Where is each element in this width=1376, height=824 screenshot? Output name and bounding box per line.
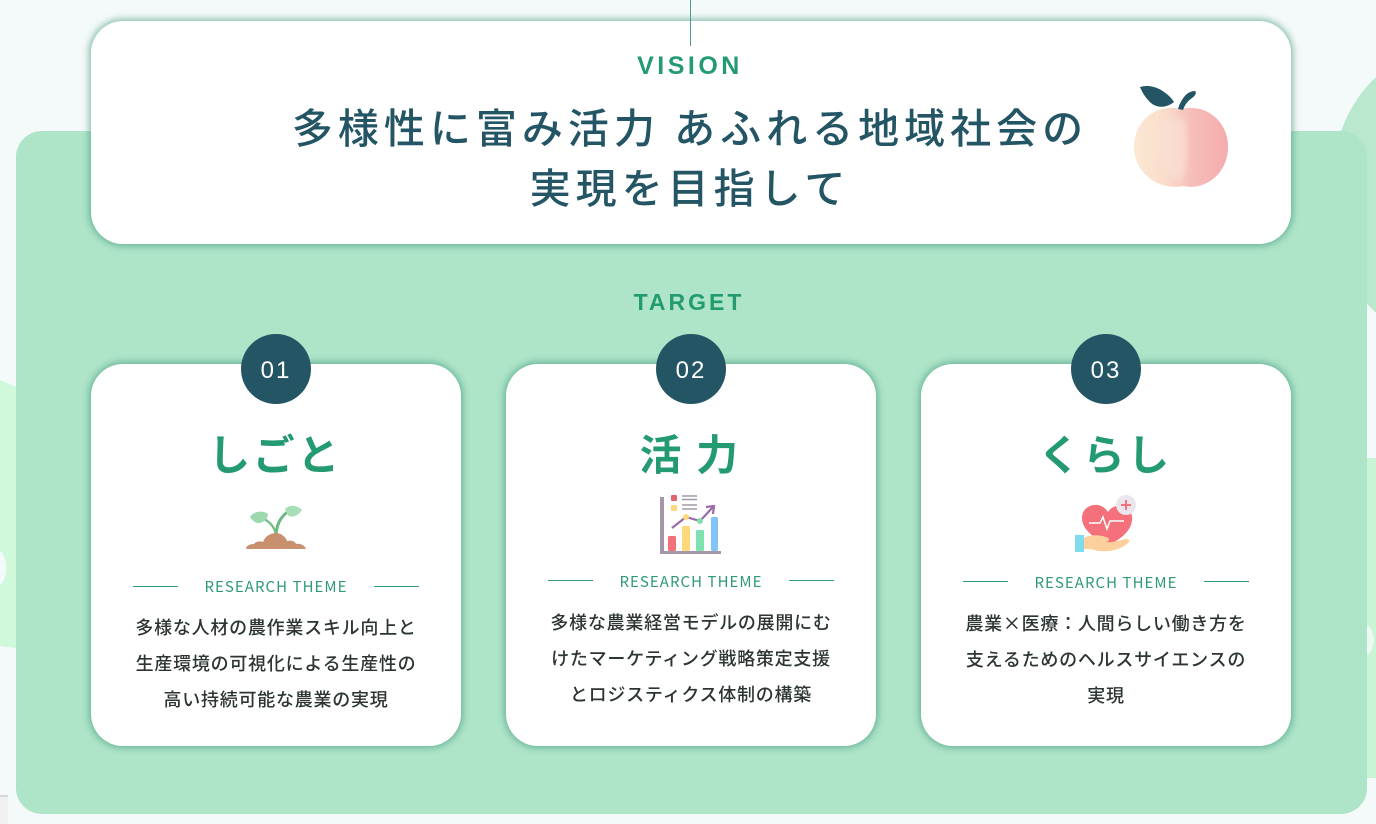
card 1: しごと	[91, 364, 461, 746]
number badge 02	[656, 334, 726, 404]
number badge 01: 01	[261, 357, 291, 384]
background blob: top right	[1330, 55, 1376, 335]
number badge 02: 02	[676, 357, 706, 384]
card 3 text: 実現	[1087, 682, 1125, 708]
card 3 text: 農業×医療：人間らしい働き方を	[965, 610, 1247, 636]
card 1 text: 高い持続可能な農業の実現	[164, 686, 388, 712]
card 3 heading: くらし	[1038, 422, 1172, 483]
card 3: くらし	[921, 364, 1291, 746]
icon: sprout	[246, 506, 306, 549]
card 1 text: 生産環境の可視化による生産性の	[136, 650, 416, 676]
number badge 03: 03	[1091, 357, 1121, 384]
window edge fragment	[0, 795, 8, 824]
background blob: right	[1300, 458, 1376, 778]
card 2 heading: 活 力	[639, 422, 741, 483]
vision title: 多様性に富み活力 あふれる地域社会の	[292, 95, 1088, 155]
divider right	[1204, 581, 1249, 582]
number badge 03	[1071, 334, 1141, 404]
card 2 text: とロジスティクス体制の構築	[570, 681, 812, 707]
card 1 heading: しごと	[208, 422, 342, 483]
background blob: right notch	[1352, 624, 1374, 656]
vision label: VISION	[637, 52, 743, 80]
divider left	[548, 580, 593, 581]
divider right	[789, 580, 834, 581]
card 1 text	[135, 614, 417, 712]
card 2 text	[550, 609, 832, 707]
number badge 01	[241, 334, 311, 404]
icon: chart	[660, 495, 721, 554]
card 3 text	[965, 610, 1247, 708]
research theme label: RESEARCH THEME	[619, 571, 763, 592]
card 2 text: けたマーケティング戦略策定支援	[551, 645, 831, 671]
divider right	[374, 586, 419, 587]
vision title	[292, 95, 1088, 215]
card 2: 活力	[506, 364, 876, 746]
card 3 text: 支えるためのヘルスサイエンスの	[966, 646, 1246, 672]
target label: TARGET	[634, 289, 744, 315]
card 1 text: 多様な人材の農作業スキル向上と	[135, 614, 417, 640]
card 2 text: 多様な農業経営モデルの展開にむ	[550, 609, 832, 635]
panel: vision	[91, 21, 1291, 244]
connector line	[690, 0, 691, 46]
icon: heart in hand	[1075, 495, 1136, 552]
background blob: left	[0, 380, 16, 648]
divider left	[133, 586, 178, 587]
icon: peach	[1134, 86, 1228, 187]
divider left	[963, 581, 1008, 582]
research theme label: RESEARCH THEME	[1034, 572, 1178, 593]
research theme label: RESEARCH THEME	[204, 576, 348, 597]
vision title: 実現を目指して	[530, 155, 850, 215]
